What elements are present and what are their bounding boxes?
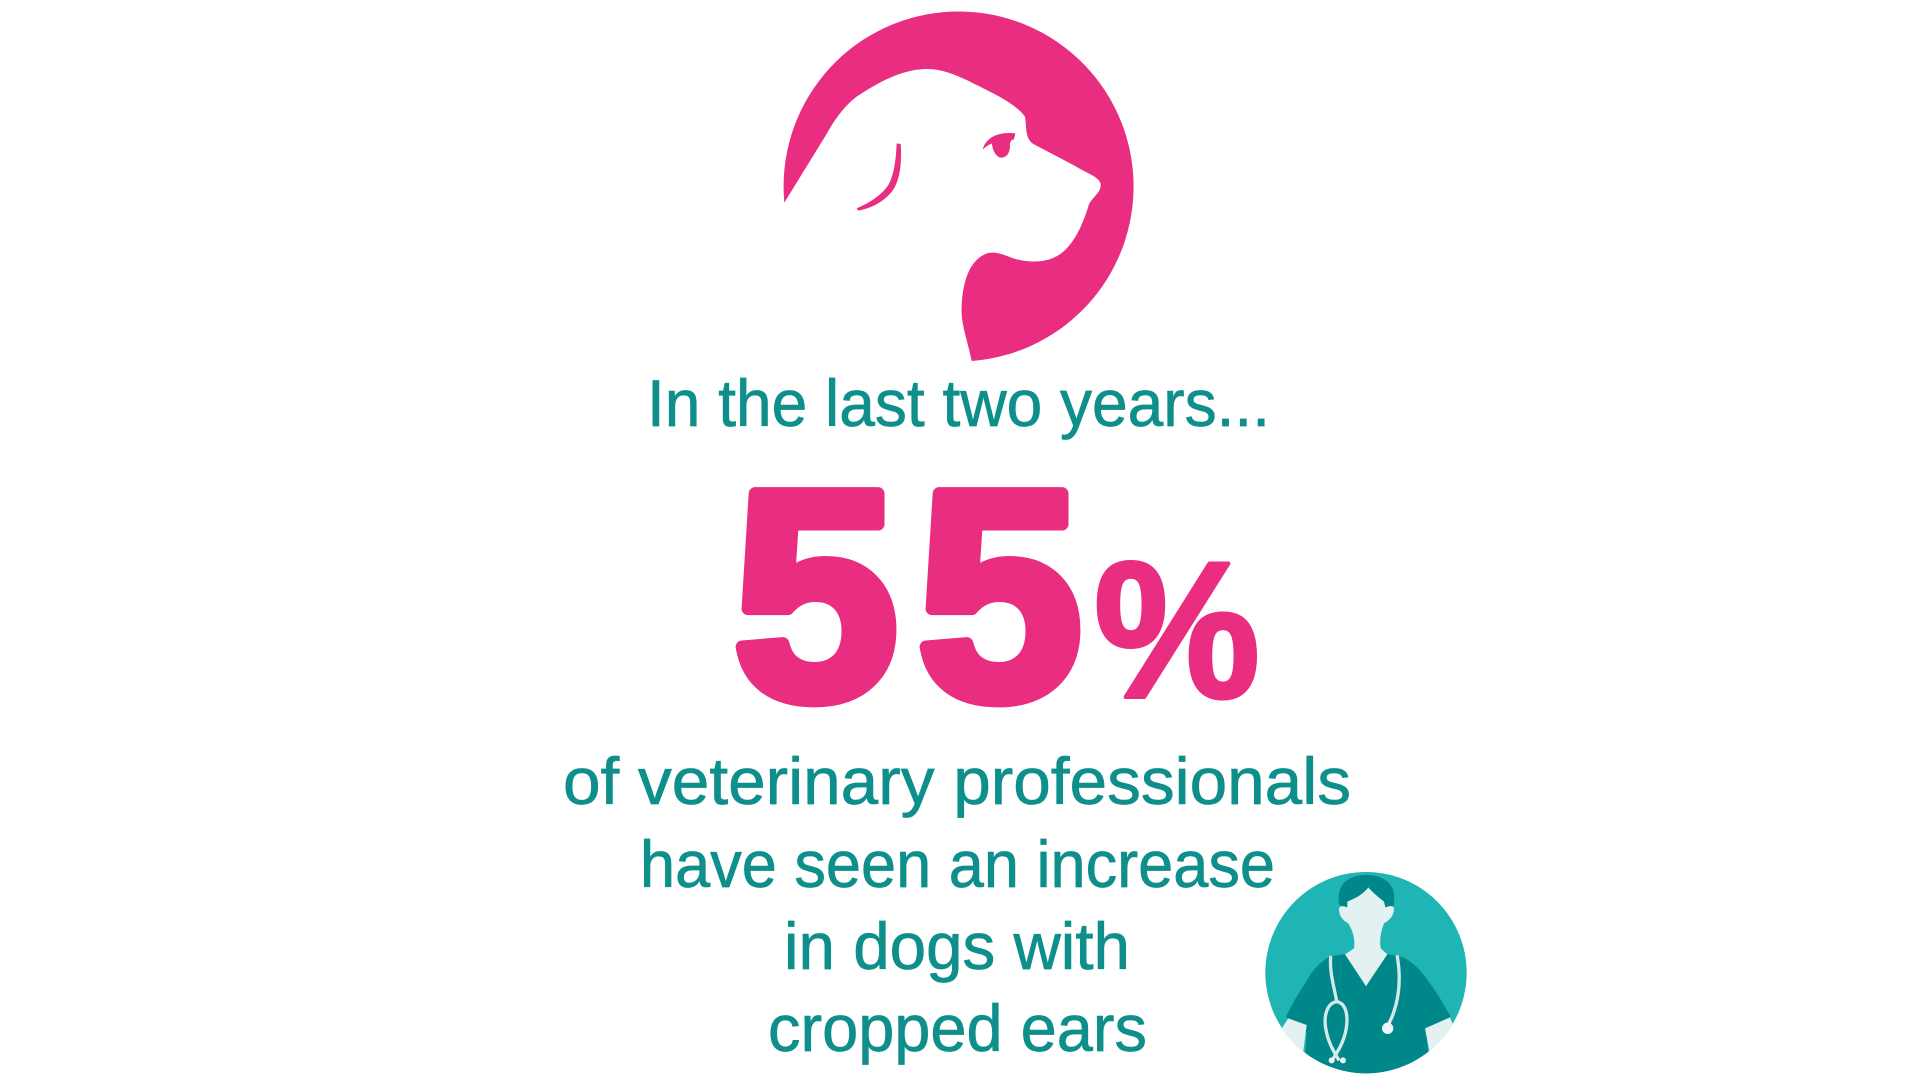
icon: dog head silhouette in pink circle	[784, 11, 1134, 361]
stethoscope	[1325, 957, 1399, 1059]
heading: in the last two years: In the last two years...	[647, 366, 1270, 440]
face and neck	[1339, 887, 1394, 986]
text block: description	[563, 744, 1351, 1065]
text block: description: cropped ears	[768, 991, 1147, 1065]
text block: description: have seen an increase	[640, 827, 1275, 901]
arms	[1282, 1018, 1307, 1052]
infographic canvas	[566, 12, 1467, 1074]
percent sign: %	[1094, 522, 1260, 739]
text block: description: in dogs with	[784, 909, 1130, 983]
big number: 55: 55	[733, 429, 1082, 761]
hair	[1339, 875, 1394, 910]
text block: description: of veterinary professionals	[563, 744, 1351, 818]
icon: dog eye	[983, 133, 1015, 158]
scrubs	[1286, 954, 1451, 1080]
icon: veterinarian in teal circle	[1265, 872, 1467, 1080]
icon: dog ear line	[857, 143, 901, 211]
